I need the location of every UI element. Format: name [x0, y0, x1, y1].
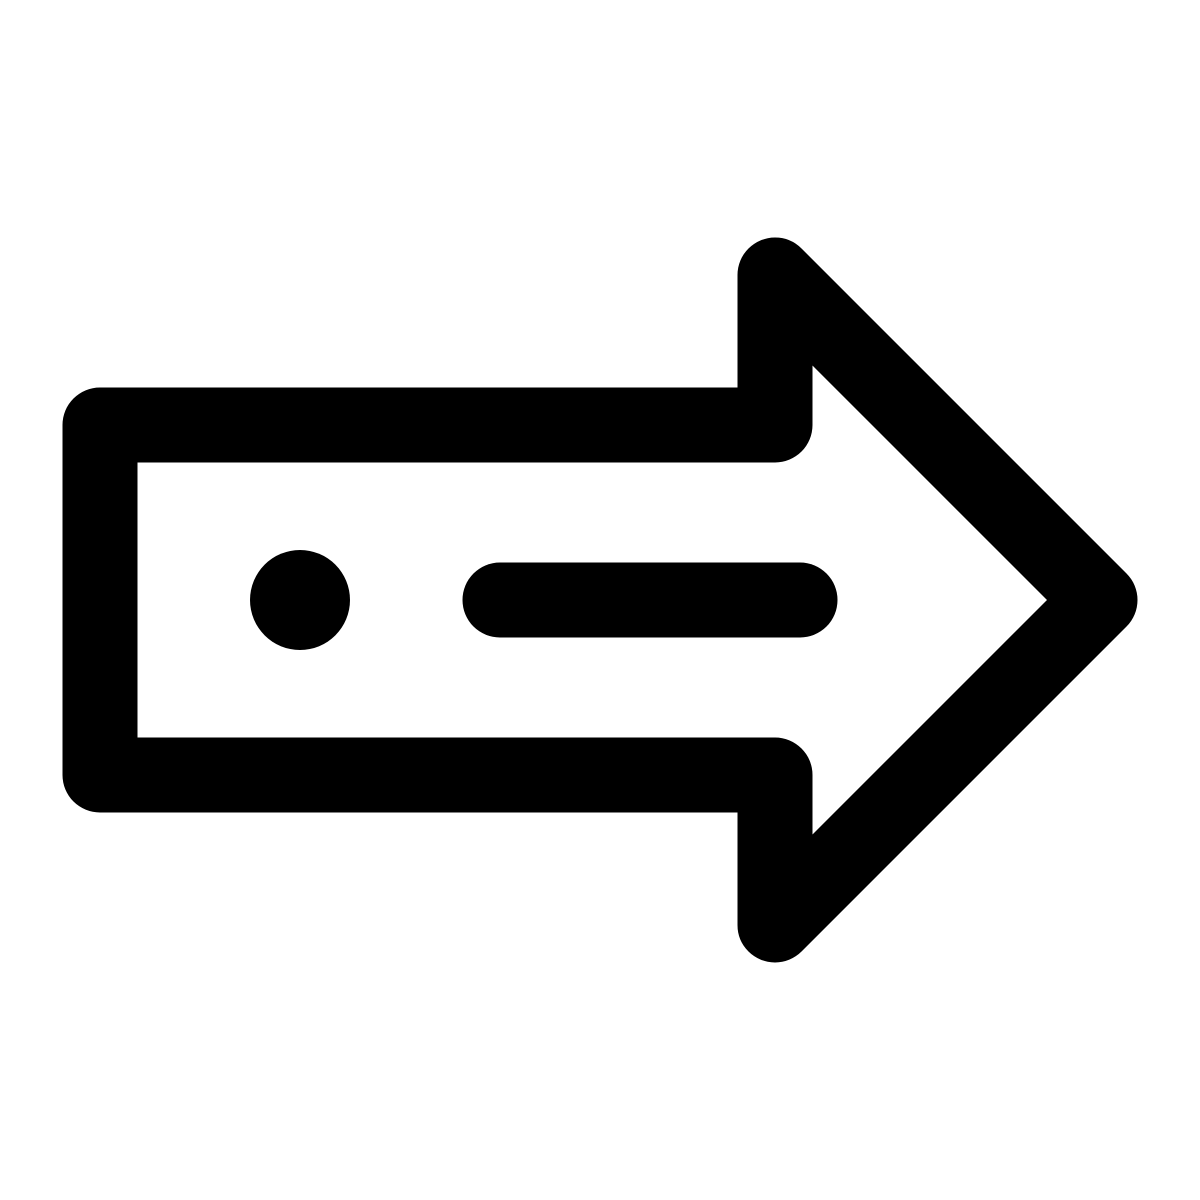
dot: [250, 550, 350, 650]
arrow outline: [100, 275, 1100, 925]
dash: [500, 562, 800, 638]
